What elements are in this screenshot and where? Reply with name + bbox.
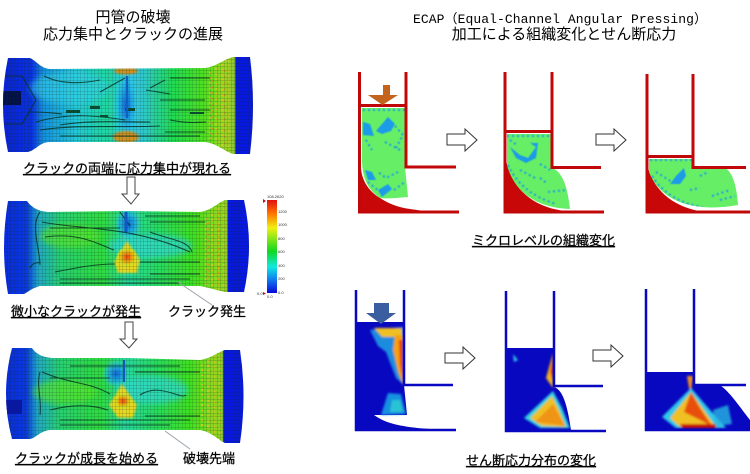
colour scale legend: 400: [278, 263, 285, 268]
shear diagram 3: [646, 289, 750, 430]
label: crack occurrence: クラック発生: [168, 304, 246, 319]
arrow: right micro 2: [596, 129, 626, 151]
colour scale legend: 108.2620: [267, 194, 284, 199]
colour scale legend: 200: [278, 276, 285, 281]
press arrow: orange: [368, 85, 398, 105]
colour scale legend: 1000: [278, 222, 288, 227]
leader line: crack occurrence: [178, 282, 212, 305]
colour scale legend: 800: [278, 236, 285, 241]
label: micro crack: 微小なクラックが発生: [11, 304, 141, 319]
title: ECAP: 加工による組織変化とせん断応力: [452, 26, 676, 43]
pipe model 1: [0, 55, 255, 155]
streamlines: [4, 76, 210, 136]
colour scale legend: 600: [278, 249, 285, 254]
label: crack growth: クラックが成長を始める: [15, 451, 158, 466]
colour scale legend: [257, 194, 288, 299]
micro diagram 2: [505, 72, 604, 212]
press arrow: blue: [366, 303, 396, 324]
micro diagram 3: [647, 74, 750, 213]
colour scale legend: 0.0: [267, 294, 273, 299]
shear diagram 1: [356, 290, 456, 430]
title: ECAP: [413, 12, 707, 43]
title: pipe failure: 応力集中とクラックの進展: [43, 26, 223, 43]
streamlines: [30, 212, 205, 283]
label: micro structure change: ミクロレベルの組織変化: [472, 233, 615, 248]
arrow: down 2: [120, 322, 137, 348]
colour scale legend: 0.0: [278, 290, 284, 295]
colour scale legend: 0.0: [257, 291, 263, 296]
arrow: right shear 1: [445, 347, 475, 369]
arrow: right micro 1: [447, 129, 477, 151]
colour scale legend: 1200: [278, 209, 288, 214]
arrow: down 1: [122, 177, 139, 204]
pipe model 3: [0, 345, 250, 445]
leader line: fracture tip: [165, 431, 190, 449]
micro diagram 1: [360, 72, 459, 212]
label: stress concentration: クラックの両端に応力集中が現れる: [23, 161, 231, 176]
title: pipe failure: [43, 8, 223, 43]
label: shear stress distribution change: せん断応力分布の変化: [466, 453, 596, 468]
title: pipe failure: 円管の破壊: [95, 8, 171, 26]
arrow: right shear 2: [593, 345, 623, 367]
title: ECAP: ECAP（Equal-Channel Angular Pressing）: [413, 12, 707, 27]
shear diagram 2: [506, 291, 606, 431]
label: fracture tip: 破壊先端: [183, 451, 235, 466]
streamlines: [39, 366, 200, 425]
pipe model 2: [0, 198, 255, 296]
